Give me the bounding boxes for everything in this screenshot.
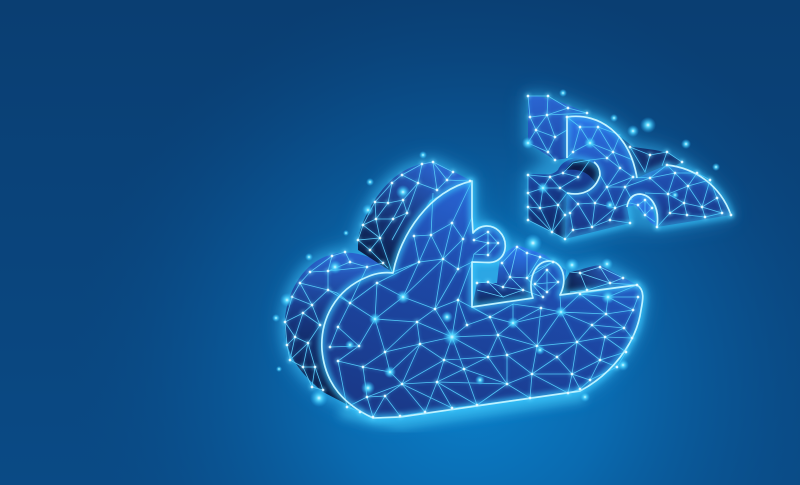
sparkles xyxy=(272,89,720,407)
cloud right back edge xyxy=(556,265,637,297)
cloud glowing outline xyxy=(322,181,643,418)
cloud xyxy=(285,162,643,424)
piece glowing outline xyxy=(565,116,731,239)
cloud mesh nodes xyxy=(285,162,638,417)
piece notch shadow xyxy=(565,160,600,185)
piece right lobe extrusion xyxy=(622,138,682,182)
cloud front face xyxy=(322,181,643,418)
cloud mesh xyxy=(285,162,638,417)
piece mesh xyxy=(528,96,722,239)
cloud lower-left extruded lobe xyxy=(285,253,395,418)
cloud interior puzzle cut-out surfaces xyxy=(472,245,566,308)
piece lower-left extrusion xyxy=(528,158,597,239)
piece halo xyxy=(528,96,731,239)
cloud upper extruded lobe xyxy=(358,162,472,274)
piece lower notch surface xyxy=(627,193,657,227)
cloud halo xyxy=(285,162,643,424)
piece front face xyxy=(565,116,731,239)
puzzle piece xyxy=(528,96,731,239)
piece upper-left extrusion xyxy=(528,96,590,160)
piece mesh nodes xyxy=(528,96,731,239)
